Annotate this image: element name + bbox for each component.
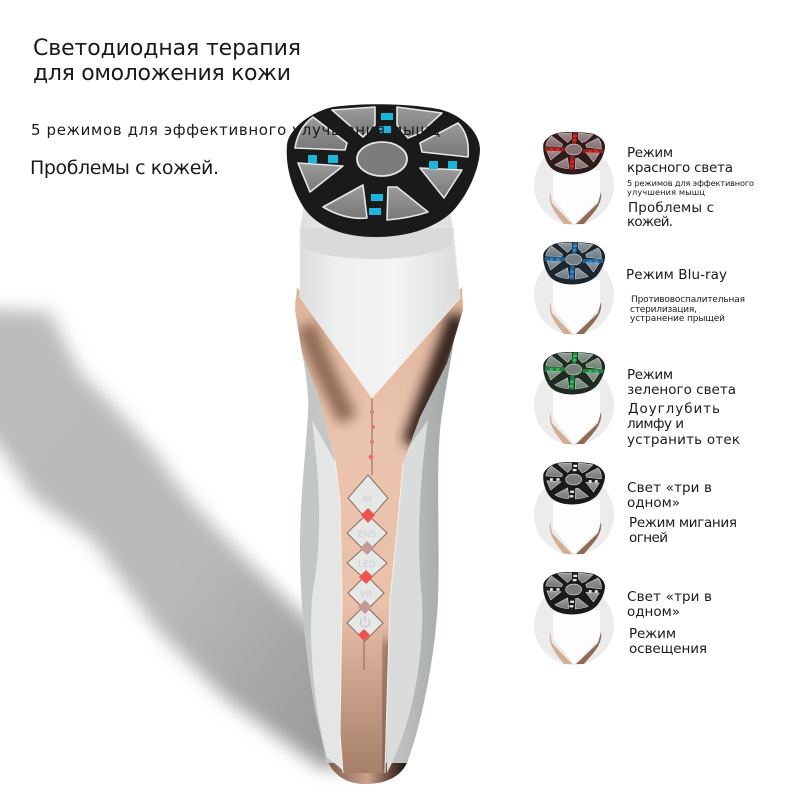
indicator dots (369, 410, 375, 459)
device: main handset (287, 104, 480, 784)
control buttons (347, 475, 388, 641)
label: green mode: зеленого света (627, 382, 736, 398)
drop shadow of device (0, 308, 340, 770)
strip lower right shade (384, 640, 388, 780)
mode: flashing three-in-one (534, 462, 737, 555)
gold band and centre strip (290, 285, 470, 780)
label: flashing mode: одном» (627, 495, 680, 511)
label: red mode: кожей. (627, 214, 673, 230)
label: flashing mode: Режим мигания (629, 515, 737, 531)
label: green mode: лимфу и (627, 416, 684, 432)
icon: power (361, 616, 370, 627)
label: green mode: устранить отек (627, 432, 740, 448)
title: Светодиодная терапия (33, 36, 301, 61)
label: flashing mode: огней (629, 530, 668, 546)
mode: blue light (534, 242, 745, 335)
label: steady mode (627, 589, 712, 657)
strip edges (335, 460, 403, 773)
mode: red light (534, 132, 754, 230)
device head with blue lights (287, 104, 480, 237)
control buttons: ENS (358, 530, 376, 540)
label: steady mode: освещения (629, 641, 707, 657)
control buttons: LED (358, 560, 376, 570)
label: flashing mode: Свет «три в (627, 480, 712, 496)
title (33, 36, 301, 86)
device lower body (295, 300, 460, 763)
left dark streak (306, 325, 348, 420)
mode: green light (534, 352, 740, 448)
label: red mode: Режим (627, 145, 673, 161)
label: steady mode: Свет «три в (627, 589, 712, 605)
centre crease (364, 398, 372, 670)
subtitle over device: 5 режимов для эффективного улучшения мышц (31, 121, 440, 139)
label: blue mode: устранение прыщей (630, 314, 725, 324)
right inner panel (385, 420, 428, 773)
label: blue mode: Противовоспалительная (631, 295, 745, 305)
label: red mode: красного света (627, 160, 733, 176)
mode: steady three-in-one (534, 572, 712, 665)
label: blue mode: стерилизация, (630, 305, 697, 315)
thumbnail: red device (534, 132, 614, 225)
label: blue mode: Режим Blu-ray (626, 267, 727, 283)
label: red mode: улучшения мышц (627, 187, 705, 197)
label: steady mode: одном» (627, 604, 680, 620)
label: red mode (627, 145, 754, 230)
label: steady mode: Режим (629, 626, 676, 642)
label: red mode: Проблемы с (628, 200, 714, 216)
thumbnail: steady device (534, 572, 614, 665)
label: green mode: Доуглубить (628, 401, 720, 417)
label: green mode: Режим (627, 367, 673, 383)
thumbnail: blue device (534, 242, 614, 335)
device bottom cap (327, 760, 408, 784)
thumbnail: flashing device (534, 462, 614, 555)
label: red mode: 5 режимов для эффективного (627, 178, 754, 188)
thumbnail: green device (534, 352, 614, 445)
title: для омоложения кожи (33, 61, 291, 86)
left inner panel (311, 420, 345, 772)
control buttons: VR (360, 590, 372, 600)
neck band (300, 228, 454, 259)
label: blue mode (626, 267, 745, 324)
right dark streak (412, 315, 458, 445)
label: green mode (627, 367, 740, 448)
control buttons: RF (362, 495, 374, 505)
label: flashing mode (627, 480, 737, 546)
subtitle second line: Проблемы с кожей. (30, 157, 219, 179)
upper white shell (300, 200, 460, 398)
